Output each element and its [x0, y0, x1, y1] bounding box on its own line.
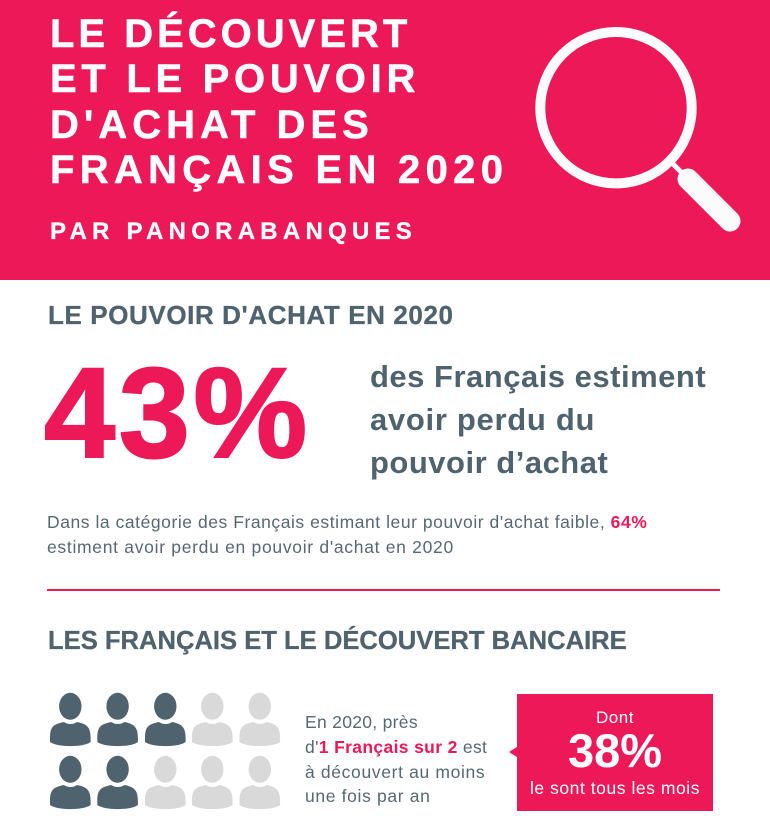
heading: le pouvoir d'achat: LE POUVOIR D'ACHAT EN 2020 [48, 300, 454, 330]
text block: 1 Français sur 2 [305, 712, 487, 806]
callout: 38%: le sont tous les mois [530, 778, 700, 798]
text block: 1 Français sur 2: d'1 Français sur 2 est [305, 736, 487, 756]
text block: 64%: estiment avoir perdu en pouvoir d'achat en 2020 [47, 537, 454, 557]
title: FRANÇAIS EN 2020 [50, 148, 508, 192]
text block: 1 Français sur 2: En 2020, près [305, 712, 418, 732]
text block: 1 Français sur 2: une fois par an [305, 786, 431, 806]
callout: 38% [509, 694, 713, 811]
stat description: des Français estiment [370, 359, 706, 394]
heading: découvert bancaire: LES FRANÇAIS ET LE DÉCOUVERT BANCAIRE [48, 627, 627, 655]
callout: 38%: 38% [568, 724, 662, 777]
callout: 38%: Dont [596, 708, 634, 727]
pictogram: 5 of 10 people [50, 692, 280, 810]
title [50, 11, 508, 192]
stat description: pouvoir d’achat [370, 445, 608, 480]
big stat 43%: 43% [44, 342, 311, 485]
title: ET LE POUVOIR [50, 57, 420, 101]
icon: magnifying glass [535, 27, 740, 232]
title: LE DÉCOUVERT [50, 12, 411, 56]
subtitle: PAR PANORABANQUES [50, 218, 417, 245]
text block: 1 Français sur 2: à découvert au moins [305, 762, 485, 782]
stat description [370, 359, 706, 480]
text block: 64%: Dans la catégorie des Français estimant leur pouvoir d'achat faible, 64% [47, 512, 647, 532]
stat description: avoir perdu du [370, 402, 595, 437]
title: D'ACHAT DES [50, 103, 374, 147]
text block: 64% [47, 512, 647, 557]
header banner [0, 0, 770, 280]
